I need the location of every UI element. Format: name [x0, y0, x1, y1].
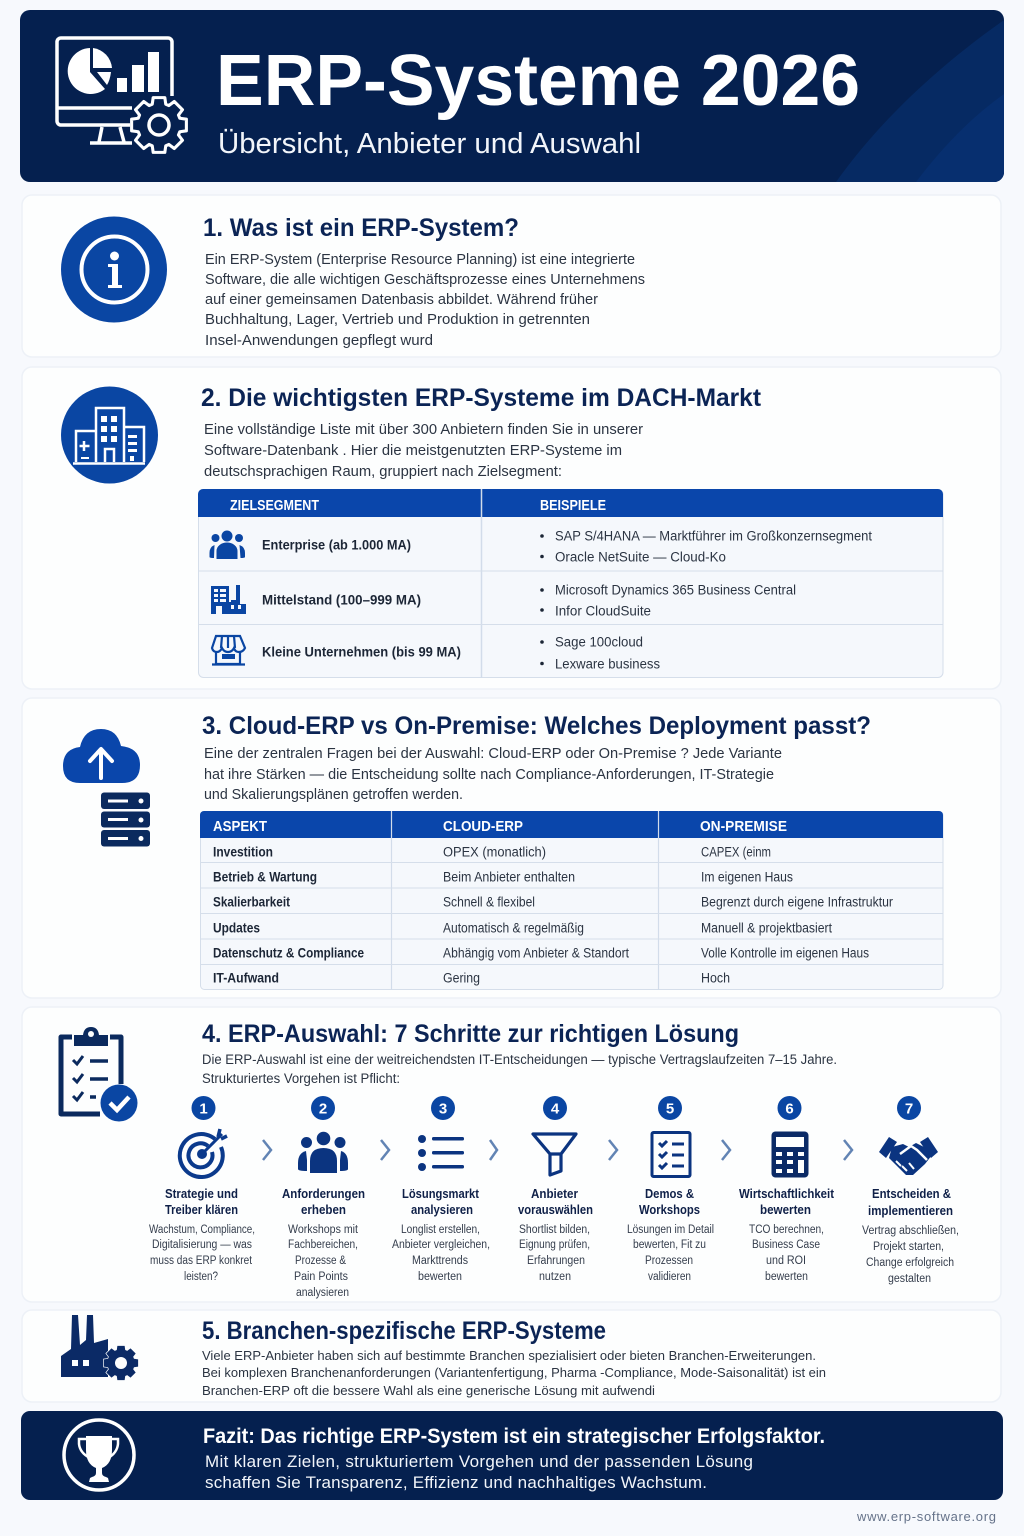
panel: Fazit [21, 1411, 1003, 1500]
panel: Branchen-spezifische ERP-Systeme [22, 1310, 1001, 1402]
step 2: analysieren [296, 1287, 349, 1299]
row: Investition: Investition [213, 844, 273, 860]
step 1: Wachstum, Compliance, [149, 1224, 255, 1236]
step 2: Workshops mit [288, 1224, 359, 1236]
panel: 7 Schritte [22, 1007, 1001, 1302]
row: Updates: Updates [213, 920, 260, 936]
text block [204, 422, 643, 480]
arrow [490, 1140, 497, 1160]
step 3: Longlist erstellen, [401, 1224, 480, 1236]
row: Investition: CAPEX (einm [701, 844, 771, 860]
text block: schaffen Sie Transparenz, Effizienz und nachhaltiges Wachstum. [205, 1473, 707, 1492]
step 2: Anforderungen [282, 1187, 365, 1201]
text block [202, 1052, 837, 1086]
row: Betrieb und Wartung: Im eigenen Haus [701, 870, 793, 884]
table header: ON-PREMISE [700, 819, 787, 835]
row: Skalierbarkeit [213, 894, 893, 910]
step 5 [627, 1096, 714, 1283]
row: Enterprise: Oracle NetSuite — Cloud-Ko [555, 550, 726, 564]
arrow [263, 1140, 271, 1160]
icon: list [418, 1135, 464, 1171]
row: Mittelstand [211, 582, 796, 618]
text block: Die ERP-Auswahl ist eine der weitreichendsten IT-Entscheidungen — typische Vertragslaufzeiten 7–15 Jahre. [202, 1052, 837, 1067]
arrow [722, 1140, 730, 1160]
icon: monitor with charts and gear [57, 38, 186, 152]
table: Vergleich Cloud und On-Premise [200, 811, 943, 990]
row: Betrieb und Wartung: Betrieb & Wartung [213, 870, 317, 884]
step 4: Eignung prüfen, [519, 1239, 590, 1251]
icon: cloud and server [63, 729, 150, 846]
text block: Buchhaltung, Lager, Vertrieb und Produktion in getrennten [205, 312, 590, 328]
row: Kleine Unternehmen: Lexware business [555, 656, 660, 672]
row: Enterprise [210, 528, 872, 564]
step 6: TCO berechnen, [749, 1224, 824, 1236]
row: Betrieb und Wartung [213, 870, 793, 884]
table: Zielsegmente [198, 489, 943, 678]
step 5: Lösungen im Detail [627, 1224, 714, 1236]
row: Skalierbarkeit: Begrenzt durch eigene Infrastruktur [701, 894, 893, 910]
row: Updates [213, 920, 832, 936]
title: ERP-Systeme 2026 [216, 41, 860, 121]
step 2 [282, 1096, 365, 1299]
text block: hat ihre Stärken — die Entscheidung sollte nach Compliance-Anforderungen, IT-Strategie [204, 767, 774, 783]
text block: Eine vollständige Liste mit über 300 Anbietern finden Sie in unserer [204, 422, 643, 438]
icon: buildings [61, 386, 158, 484]
icon: people [298, 1132, 348, 1173]
step 2: Prozesse & [295, 1255, 346, 1267]
step 7: Projekt starten, [873, 1241, 944, 1253]
text block: Mit klaren Zielen, strukturiertem Vorgehen und der passenden Lösung [205, 1452, 753, 1471]
step 4: Erfahrungen [527, 1255, 585, 1267]
step 2: erheben [301, 1203, 346, 1217]
text block: Eine der zentralen Fragen bei der Auswahl: Cloud-ERP oder On-Premise ? Jede Variante [204, 746, 782, 762]
step 5: validieren [648, 1271, 691, 1283]
step 7: Vertrag abschließen, [862, 1225, 959, 1237]
row: Betrieb und Wartung: Beim Anbieter enthalten [443, 870, 575, 884]
row: IT-Aufwand [213, 970, 730, 986]
row: Datenschutz und Compliance: Volle Kontrolle im eigenen Haus [701, 946, 869, 960]
icon: clipboard checklist [61, 1027, 138, 1122]
text block: auf einer gemeinsamen Datenbasis abbildet. Während früher [205, 292, 598, 308]
panel: header banner [20, 10, 1004, 182]
icon: trophy [64, 1420, 134, 1490]
row: IT-Aufwand: Hoch [701, 970, 730, 986]
heading: 3. Cloud-ERP vs On-Premise: Welches Deployment passt? [202, 712, 871, 740]
step 2: Fachbereichen, [288, 1239, 358, 1251]
row: Datenschutz und Compliance: Datenschutz & Compliance [213, 946, 364, 960]
row: Skalierbarkeit: Skalierbarkeit [213, 894, 290, 910]
arrow [844, 1140, 852, 1160]
row: Skalierbarkeit: Schnell & flexibel [443, 894, 535, 910]
row: Investition [213, 844, 771, 860]
row: Updates: Automatisch & regelmäßig [443, 920, 584, 936]
row: Enterprise: SAP S/4HANA — Marktführer im Großkonzernsegment [555, 528, 872, 544]
row: Investition: OPEX (monatlich) [443, 844, 546, 860]
step 7: 7 [905, 1100, 913, 1118]
panel: wichtigste ERP-Systeme im DACH-Markt [22, 367, 1001, 689]
text block: Insel-Anwendungen gepflegt wurd [205, 333, 433, 349]
step 7: Entscheiden & [872, 1187, 951, 1201]
step 1: 1 [199, 1100, 208, 1118]
table header [213, 819, 787, 835]
step 1: Digitalisierung — was [152, 1239, 252, 1251]
icon: handshake [879, 1137, 938, 1175]
step 3: Anbieter vergleichen, [392, 1239, 490, 1251]
table header [230, 498, 606, 514]
panel: Cloud-ERP vs On-Premise [22, 698, 1001, 998]
row: Mittelstand: Infor CloudSuite [555, 604, 651, 618]
text block: und Skalierungsplänen getroffen werden. [204, 787, 463, 803]
footer url: www.erp-software.org [856, 1509, 996, 1524]
step 1: muss das ERP konkret [150, 1255, 253, 1267]
step 6 [739, 1096, 835, 1283]
icon: factory and gear [61, 1315, 138, 1380]
heading: 5. Branchen-spezifische ERP-Systeme [202, 1317, 606, 1345]
text block: Branchen-ERP oft die bessere Wahl als eine generische Lösung mit aufwendi [202, 1384, 655, 1398]
step 1: Strategie und [165, 1187, 238, 1201]
table header: ZIELSEGMENT [230, 498, 319, 514]
step 4 [518, 1096, 593, 1283]
step 6: Business Case [752, 1239, 820, 1251]
row: Datenschutz und Compliance [213, 946, 869, 960]
step 7: Change erfolgreich [866, 1257, 954, 1269]
text block [205, 1452, 753, 1492]
step 3: Lösungsmarkt [402, 1187, 480, 1201]
heading: 4. ERP-Auswahl: 7 Schritte zur richtigen Lösung [202, 1020, 739, 1048]
step 4: nutzen [539, 1271, 571, 1283]
text block: Software-Datenbank . Hier die meistgenutzten ERP-Systeme im [204, 443, 622, 459]
table header: BEISPIELE [540, 498, 606, 514]
icon: info [61, 216, 167, 322]
step 1: Treiber klären [165, 1203, 238, 1217]
icon: funnel [533, 1134, 576, 1175]
row: Enterprise: Enterprise (ab 1.000 MA) [262, 538, 411, 552]
panel: was ist ein ERP-System [22, 195, 1001, 357]
step 5: bewerten, Fit zu [633, 1239, 706, 1251]
step 3: analysieren [411, 1203, 473, 1217]
row: Kleine Unternehmen: Sage 100cloud [555, 634, 643, 650]
row: Kleine Unternehmen [212, 634, 660, 672]
row: Kleine Unternehmen: Kleine Unternehmen (bis 99 MA) [262, 644, 461, 660]
subtitle: Übersicht, Anbieter und Auswahl [218, 128, 641, 160]
text block [204, 746, 782, 803]
step 2: 2 [319, 1100, 327, 1118]
table header: ASPEKT [213, 819, 267, 835]
step 3: bewerten [418, 1271, 462, 1283]
step 7: implementieren [868, 1204, 953, 1218]
step 6: 6 [785, 1100, 794, 1118]
arrow [381, 1140, 389, 1160]
text block: Software, die alle wichtigen Geschäftsprozesse eines Unternehmens [205, 272, 645, 288]
step 6: Wirtschaftlichkeit [739, 1187, 835, 1201]
row: Updates: Manuell & projektbasiert [701, 920, 832, 936]
step 3: Markttrends [412, 1255, 468, 1267]
step 3 [392, 1096, 490, 1283]
step 2: Pain Points [294, 1271, 348, 1283]
row: Mittelstand: Microsoft Dynamics 365 Business Central [555, 582, 796, 598]
table header: CLOUD-ERP [443, 819, 523, 835]
step 6: bewerten [760, 1203, 811, 1217]
step 5: Demos & [645, 1187, 694, 1201]
heading: 2. Die wichtigsten ERP-Systeme im DACH-Markt [201, 384, 762, 412]
step 4: Shortlist bilden, [519, 1224, 590, 1236]
step 6: bewerten [765, 1271, 808, 1283]
text block [202, 1349, 826, 1398]
row: IT-Aufwand: IT-Aufwand [213, 970, 279, 986]
row: Mittelstand: Mittelstand (100–999 MA) [262, 592, 421, 608]
step 5: Prozessen [645, 1255, 693, 1267]
arrow [609, 1140, 617, 1160]
text block: Strukturiertes Vorgehen ist Pflicht: [202, 1071, 400, 1086]
icon: calculator [772, 1132, 808, 1178]
step 7 [862, 1096, 959, 1285]
text block: deutschsprachigen Raum, gruppiert nach Zielsegment: [204, 464, 562, 480]
step 3: 3 [439, 1100, 447, 1118]
step 5: 5 [666, 1100, 674, 1118]
step 5: Workshops [639, 1203, 700, 1217]
heading: 1. Was ist ein ERP-System? [203, 214, 519, 242]
step 4: Anbieter [531, 1187, 578, 1201]
icon: checklist [652, 1132, 690, 1176]
text block [205, 252, 645, 349]
icon: target [180, 1129, 227, 1177]
step 1: leisten? [184, 1271, 218, 1283]
heading: Fazit: Das richtige ERP-System ist ein strategischer Erfolgsfaktor. [203, 1425, 825, 1448]
step 7: gestalten [888, 1273, 931, 1285]
step 6: und ROI [766, 1255, 806, 1267]
text block: Bei komplexen Branchenanforderungen (Variantenfertigung, Pharma -Compliance, Mode-Saisonalität) ist ein [202, 1366, 826, 1380]
step 4: 4 [551, 1100, 560, 1118]
row: Datenschutz und Compliance: Abhängig vom Anbieter & Standort [443, 946, 629, 960]
text block: Viele ERP-Anbieter haben sich auf bestimmte Branchen spezialisiert oder bieten Branchen-Erweiterungen. [202, 1349, 816, 1363]
step 1 [149, 1096, 255, 1283]
text block: Ein ERP-System (Enterprise Resource Planning) ist eine integrierte [205, 252, 635, 268]
step 4: vorauswählen [518, 1203, 593, 1217]
row: IT-Aufwand: Gering [443, 970, 480, 986]
